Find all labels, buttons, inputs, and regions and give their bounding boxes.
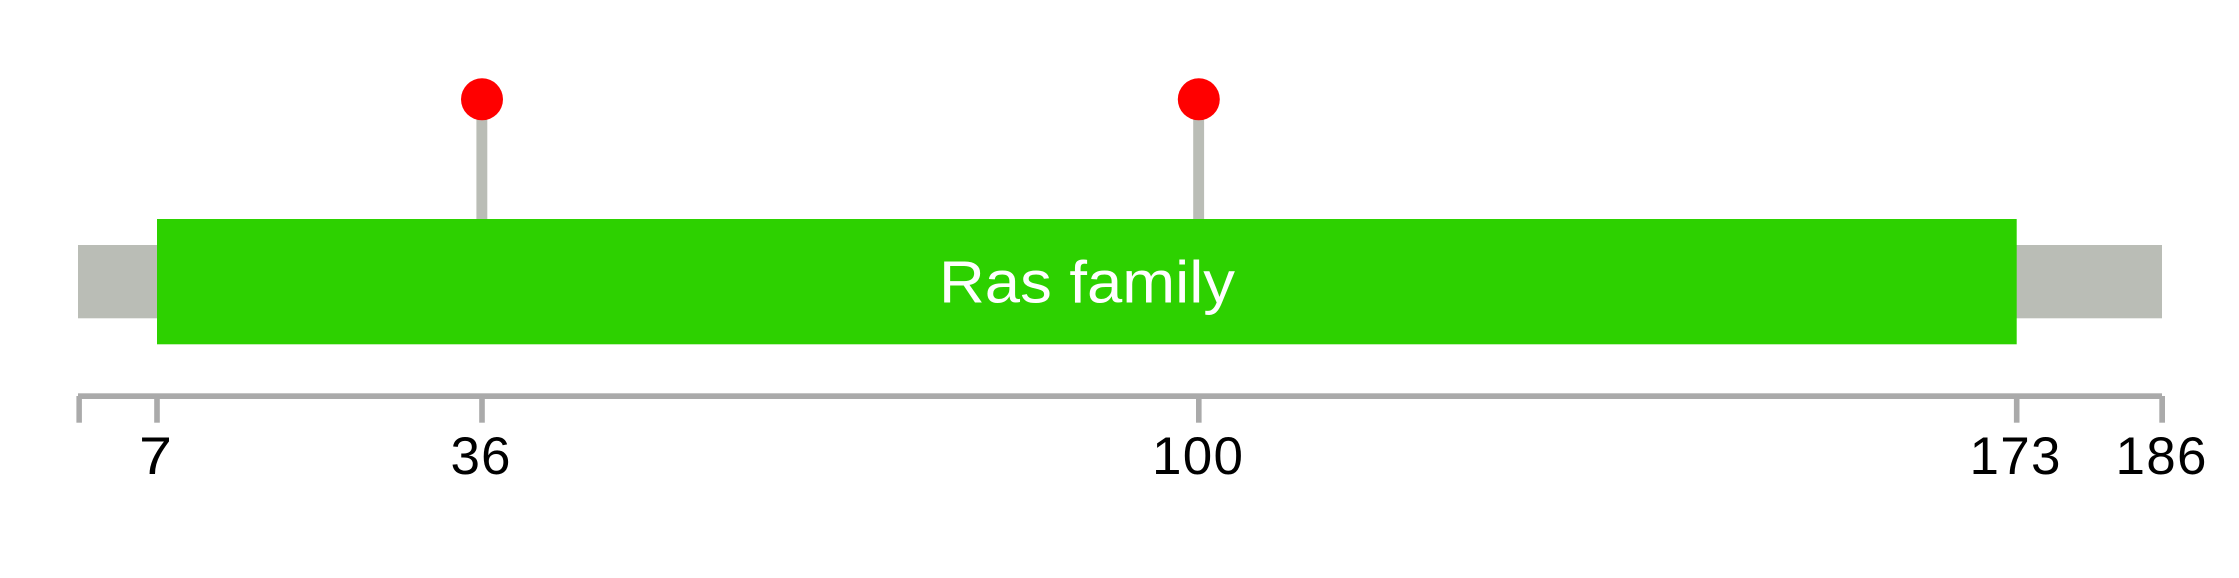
domain label: Ras family	[939, 250, 1236, 316]
axis labels: 173	[1970, 427, 2060, 486]
protein backbone: grey bar	[78, 245, 2162, 318]
axis labels: 7	[139, 427, 172, 486]
axis labels	[139, 427, 2206, 486]
marker: lollipop at residue 100	[1178, 78, 1220, 220]
marker: lollipop at residue 36	[461, 78, 503, 220]
axis labels: 100	[1152, 427, 1243, 486]
domain: Ras family	[157, 219, 2017, 344]
axis labels: 186	[2116, 427, 2206, 486]
axis labels: 36	[450, 427, 510, 486]
position axis	[76, 393, 2165, 423]
